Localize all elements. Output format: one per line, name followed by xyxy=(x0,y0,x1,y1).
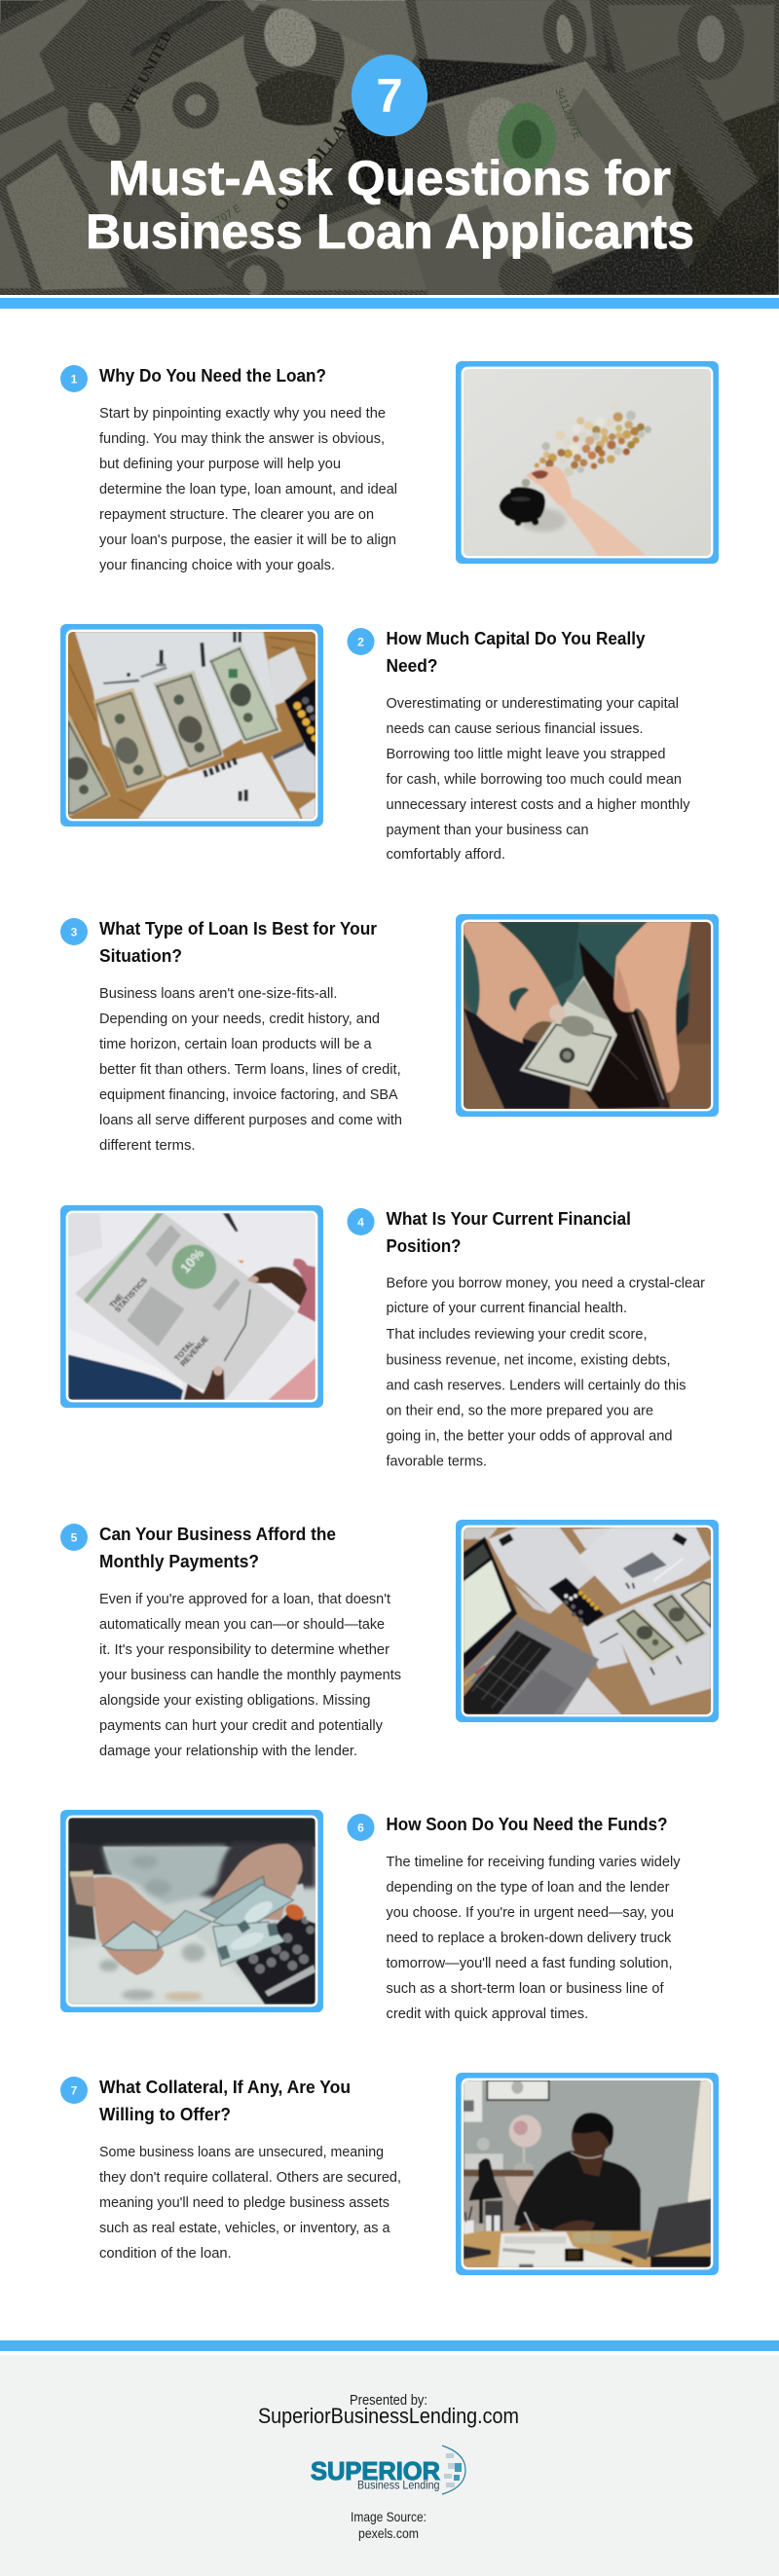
main title: Must-Ask Questions for xyxy=(108,151,671,205)
number badge 6: 6 xyxy=(357,1821,364,1834)
body text 1: determine the loan type, loan amount, and ideal xyxy=(99,482,397,497)
heading 1: Why Do You Need the Loan? xyxy=(99,366,326,386)
body text 2: payment than your business can xyxy=(386,823,588,838)
calculator xyxy=(236,1914,315,2005)
body text 4: That includes reviewing your credit score, xyxy=(386,1327,647,1343)
photo: statistics document in hands xyxy=(60,1205,323,1408)
far right bill xyxy=(599,0,779,123)
panel: question 7 xyxy=(60,2073,719,2275)
wallet xyxy=(570,941,670,1109)
number badge 6 xyxy=(347,1814,374,1841)
heading 4 xyxy=(386,1209,631,1256)
hands and sleeves xyxy=(68,1354,183,1400)
body text 3: Business loans aren't one-size-fits-all. xyxy=(99,986,337,1002)
bill lettering: E 34112707 E xyxy=(180,202,243,248)
bill lettering: 34112707E xyxy=(552,87,583,141)
body text 6: such as a short-term loan or business line of xyxy=(386,1981,664,1997)
body text 3: different terms. xyxy=(99,1138,195,1154)
number badge 4 xyxy=(347,1208,374,1235)
body text 5: Even if you're approved for a loan, that doesn't xyxy=(99,1592,390,1607)
bill right centre xyxy=(399,61,680,275)
logo: Superior Business Lending: Business Lending xyxy=(357,2479,440,2492)
bill lettering xyxy=(119,28,583,248)
body text 5: damage your relationship with the lender. xyxy=(99,1744,357,1759)
heading 7: Willing to Offer? xyxy=(99,2105,231,2124)
body text 6: tomorrow—you'll need a fast funding solution, xyxy=(386,1956,672,1971)
bills xyxy=(614,1606,677,1665)
desk xyxy=(464,2231,711,2267)
chart line xyxy=(224,1290,250,1361)
number badge 5: 5 xyxy=(71,1530,78,1544)
body text 1: your loan's purpose, the easier it will be to align xyxy=(99,533,396,548)
body text 7: Some business loans are unsecured, meaning xyxy=(99,2145,384,2160)
body text 6: depending on the type of loan and the lender xyxy=(386,1880,670,1895)
panel: question 2 xyxy=(60,624,690,863)
bill lettering: ONE DOLLAR xyxy=(270,109,358,214)
footer blue band xyxy=(0,2340,779,2351)
image source xyxy=(351,2509,427,2541)
engraving speckle over bills xyxy=(0,0,779,295)
body text 1: your financing choice with your goals. xyxy=(99,558,335,573)
logo: Superior Business Lending: SUPERIOR xyxy=(311,2456,440,2485)
header: hero photo of dollar bills with title xyxy=(0,0,779,306)
heading 2 xyxy=(386,629,645,676)
body text 3: better fit than others. Term loans, lines of credit, xyxy=(99,1062,401,1078)
body text 4: picture of your current financial health. xyxy=(386,1301,627,1316)
logo: Superior Business Lending xyxy=(311,2446,465,2494)
body text 5: it. It's your responsibility to determine whether xyxy=(99,1642,390,1658)
body text 6: need to replace a broken-down delivery truck xyxy=(386,1931,672,1946)
body text 2: Borrowing too little might leave you strapped xyxy=(386,747,666,762)
body text 2 xyxy=(386,696,690,863)
presented by label: Presented by: xyxy=(350,2393,427,2409)
phone calculator xyxy=(549,1577,605,1627)
bill xyxy=(520,975,617,1091)
body text 6: you choose. If you're in urgent need—say, you xyxy=(386,1905,674,1921)
body text 7: condition of the loan. xyxy=(99,2246,232,2262)
hero background photo: dollar bills xyxy=(0,0,779,306)
body text 2: unnecessary interest costs and a higher monthly xyxy=(386,797,690,813)
bill left centre xyxy=(122,0,384,253)
body text 4: Before you borrow money, you need a crystal-clear xyxy=(386,1275,705,1291)
left hand xyxy=(93,1877,179,1975)
header blue band xyxy=(0,298,779,309)
body text 5 xyxy=(99,1592,401,1759)
laptop xyxy=(647,2198,711,2258)
body text 7 xyxy=(99,2145,401,2262)
photo: hands counting cash xyxy=(60,1810,323,2012)
lamp xyxy=(468,2158,502,2201)
number badge 2: 2 xyxy=(357,635,364,648)
panel: question 1 xyxy=(60,361,719,573)
main title xyxy=(86,151,694,259)
heading 7 xyxy=(99,2078,351,2124)
main title: Business Loan Applicants xyxy=(86,204,694,259)
money xyxy=(102,1922,158,1950)
number badge 1 xyxy=(60,365,88,392)
heading 5: Monthly Payments? xyxy=(99,1552,259,1571)
image source: Image Source: xyxy=(351,2509,427,2524)
body text 5: payments can hurt your credit and potentially xyxy=(99,1718,384,1734)
panel: question 4 xyxy=(60,1205,705,1470)
bills xyxy=(93,688,165,792)
number seven badge: 7 xyxy=(376,70,403,123)
body text 1 xyxy=(99,406,397,573)
paper xyxy=(75,1213,296,1399)
body text 4 xyxy=(386,1275,705,1470)
body text 3: Depending on your needs, credit history, and xyxy=(99,1012,380,1027)
bill lettering: THE UNITED xyxy=(119,28,176,117)
right hand xyxy=(204,1844,302,1920)
left hand xyxy=(464,922,565,1044)
panel: question 6 xyxy=(60,1810,681,2022)
body text 4: on their end, so the more prepared you are xyxy=(386,1404,653,1419)
body text 5: alongside your existing obligations. Missing xyxy=(99,1693,370,1709)
heading 4: Position? xyxy=(386,1236,462,1256)
body text 4: and cash reserves. Lenders will certainly do this xyxy=(386,1379,686,1394)
heading 4: What Is Your Current Financial xyxy=(386,1209,631,1229)
bottom bills xyxy=(219,202,521,295)
photo document lettering: TOTAL xyxy=(172,1339,197,1363)
heading 7: What Collateral, If Any, Are You xyxy=(99,2078,351,2097)
heading 3 xyxy=(99,919,377,966)
laptop xyxy=(464,1616,599,1714)
photo: dollar bills on charts xyxy=(60,624,323,827)
photo: laptop, calculator, bills on desk xyxy=(456,1520,719,1722)
body text 2: Overestimating or underestimating your capital xyxy=(386,696,679,712)
number badge 7 xyxy=(60,2077,88,2104)
number badge 4: 4 xyxy=(357,1215,364,1229)
body text 3: equipment financing, invoice factoring, and SBA xyxy=(99,1087,398,1103)
heading 3: Situation? xyxy=(99,946,182,966)
body text 3: loans all serve different purposes and come with xyxy=(99,1113,402,1128)
body text 2: needs can cause serious financial issues. xyxy=(386,721,643,737)
man xyxy=(514,2151,641,2231)
panel: footer xyxy=(0,2355,779,2576)
body text 7: such as real estate, vehicles, or inventory, as a xyxy=(99,2221,390,2236)
body text 3: time horizon, certain loan products will be a xyxy=(99,1037,373,1052)
panel: question 5 xyxy=(60,1520,719,1759)
body text 4: business revenue, net income, existing debts, xyxy=(386,1353,670,1369)
photo document lettering: REVENUE xyxy=(178,1334,210,1368)
photo: man writing at a desk xyxy=(456,2073,719,2275)
number badge 3: 3 xyxy=(71,925,78,938)
body text 6 xyxy=(386,1855,681,2022)
number badge 3 xyxy=(60,918,88,945)
number badge 5 xyxy=(60,1524,88,1551)
panel: question 3 xyxy=(60,914,719,1154)
image source: pexels.com xyxy=(358,2525,419,2541)
body text 7: they don't require collateral. Others are secured, xyxy=(99,2170,401,2186)
heading 3: What Type of Loan Is Best for Your xyxy=(99,919,377,938)
body text 5: automatically mean you can—or should—take xyxy=(99,1617,385,1633)
photo document lettering xyxy=(108,1245,210,1368)
photo document lettering: 10% xyxy=(177,1245,207,1276)
right hand xyxy=(613,922,691,1092)
body text 3 xyxy=(99,986,402,1154)
photo: piggy bank and coins xyxy=(456,361,719,564)
number badge 1: 1 xyxy=(71,372,78,386)
website: SuperiorBusinessLending.com xyxy=(258,2404,519,2428)
body text 1: funding. You may think the answer is obvious, xyxy=(99,431,385,447)
number seven badge xyxy=(352,55,427,136)
heading 2: How Much Capital Do You Really xyxy=(386,629,645,648)
body text 5: your business can handle the monthly payments xyxy=(99,1668,401,1683)
heading 5 xyxy=(99,1525,336,1571)
body text 1: but defining your purpose will help you xyxy=(99,457,341,472)
body text 2: for cash, while borrowing too much could mean xyxy=(386,772,682,788)
body text 2: comfortably afford. xyxy=(386,847,505,863)
body text 4: going in, the better your odds of approval and xyxy=(386,1429,672,1445)
body text 4: favorable terms. xyxy=(386,1454,487,1470)
body text 6: The timeline for receiving funding varies widely xyxy=(386,1855,681,1870)
body text 6: credit with quick approval times. xyxy=(386,2006,588,2022)
photo document lettering: STATISTICS xyxy=(113,1275,149,1314)
heading 6: How Soon Do You Need the Funds? xyxy=(386,1815,668,1834)
photo: hands and wallet with dollar bill xyxy=(456,914,719,1117)
heading 5: Can Your Business Afford the xyxy=(99,1525,336,1544)
photo document lettering: THE xyxy=(108,1292,126,1309)
body text 1: Start by pinpointing exactly why you need the xyxy=(99,406,386,422)
number badge 2 xyxy=(347,628,374,655)
body text 7: meaning you'll need to pledge business assets xyxy=(99,2195,390,2211)
heading 2: Need? xyxy=(386,656,438,676)
body text 1: repayment structure. The clearer you are on xyxy=(99,507,374,523)
number badge 7: 7 xyxy=(71,2083,78,2097)
dark shadow bands xyxy=(341,108,404,209)
